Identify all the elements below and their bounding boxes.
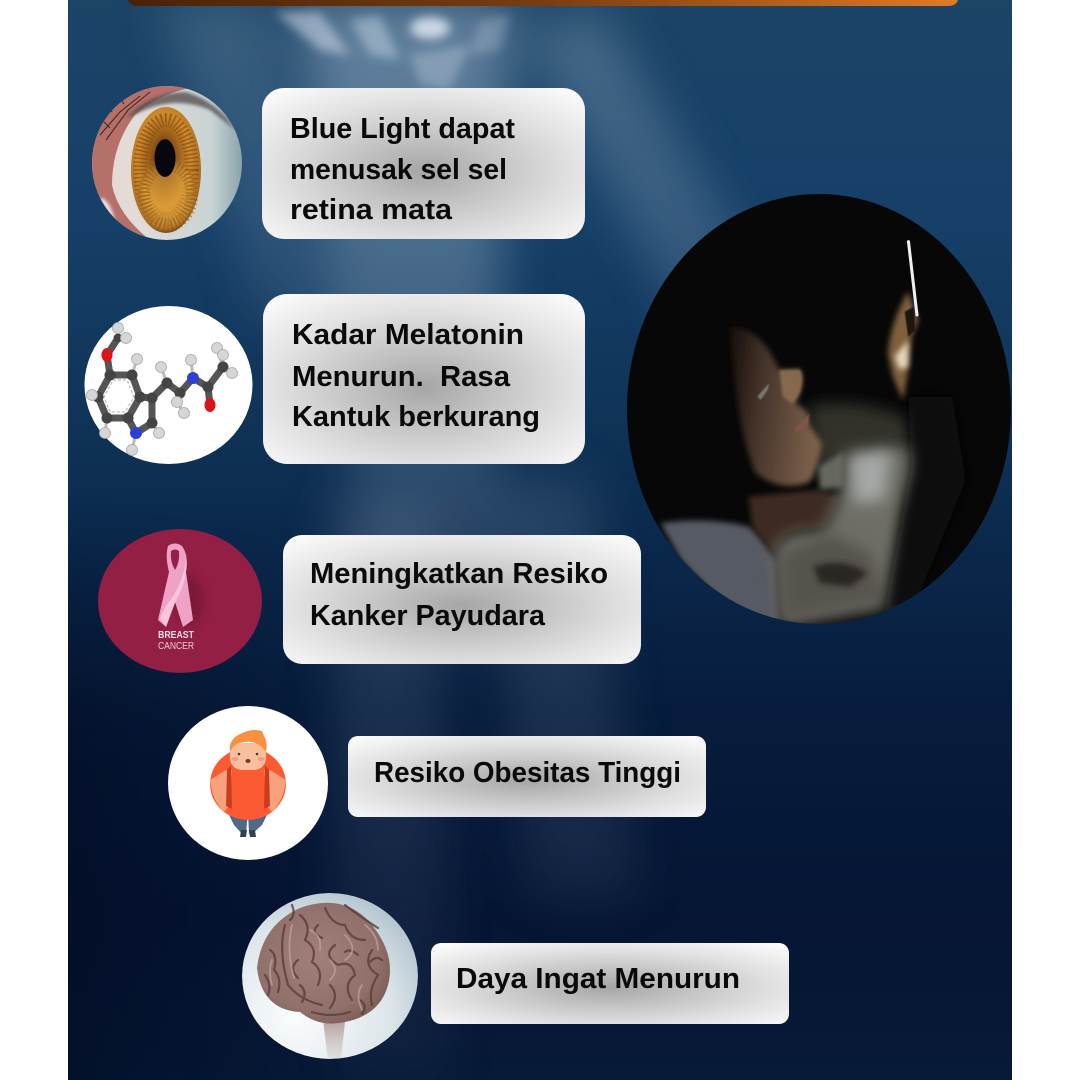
card: melatonin text: Menurun. Rasa: [292, 361, 511, 393]
card: obesity text: Resiko Obesitas Tinggi: [374, 757, 681, 789]
icon: overweight person: [168, 706, 328, 860]
card: obesity text: [348, 736, 706, 817]
icon: breast cancer ribbon: BREAST: [158, 629, 194, 641]
pillow: [661, 521, 779, 627]
item 1: eye damage: [92, 86, 585, 240]
nightgown: [773, 443, 923, 627]
card: blue light text: Blue Light dapat: [290, 113, 515, 145]
card: blue light text: [262, 88, 585, 239]
card: breast cancer text: [283, 535, 641, 664]
photo: woman using phone in bed: [620, 190, 1020, 630]
icon: melatonin molecule: [84, 306, 252, 464]
card: memory text: Daya Ingat Menurun: [456, 963, 740, 995]
card: blue light text: menusak sel sel: [290, 154, 507, 186]
icon: breast cancer ribbon: CANCER: [158, 640, 194, 652]
card: breast cancer text: Kanker Payudara: [310, 600, 546, 632]
icon: breast cancer ribbon: [98, 529, 262, 673]
sleeve and arm shadow: [877, 414, 930, 612]
icon: brain: [242, 893, 418, 1060]
item 3: breast cancer: [98, 529, 641, 673]
card: memory text: [431, 943, 789, 1024]
item 5: memory: [242, 893, 789, 1060]
hand: [888, 292, 918, 400]
item 2: melatonin: [84, 294, 585, 464]
card: melatonin text: Kadar Melatonin: [292, 319, 524, 351]
face: [728, 327, 822, 486]
item 4: obesity: [168, 706, 706, 860]
card: breast cancer text: Meningkatkan Resiko: [310, 558, 608, 590]
neck: [749, 490, 840, 553]
card: melatonin text: Kantuk berkurang: [292, 401, 540, 433]
phone: [908, 242, 917, 315]
glow behind face: [808, 404, 912, 480]
card: blue light text: retina mata: [290, 194, 453, 226]
icon: eye: [92, 86, 242, 240]
card: melatonin text: [263, 294, 585, 464]
top orange bar: [128, 0, 958, 6]
